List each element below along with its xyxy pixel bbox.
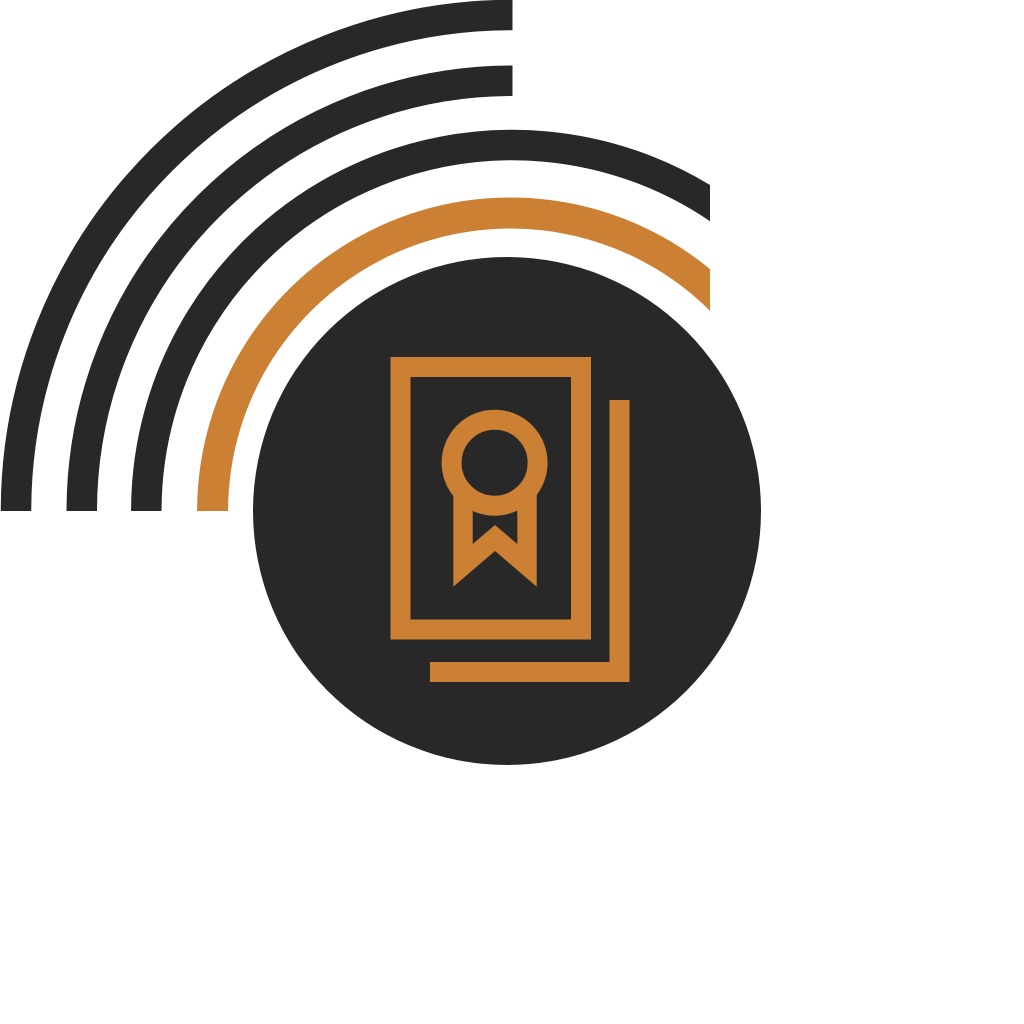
arc: second dark: [82, 81, 512, 511]
icon: front page: [400, 367, 581, 630]
icon: certificate: [400, 367, 620, 672]
infographic: certificate badge with signal arcs: [0, 0, 761, 765]
icon: back page corner: [430, 400, 620, 672]
arc: inner orange: [213, 213, 731, 511]
icon: ribbon tails: [453, 480, 537, 587]
arc: outermost dark: [16, 15, 512, 511]
dark circle background: [253, 257, 761, 765]
icon: medal ring: [452, 420, 538, 506]
arc: third dark: [146, 145, 732, 511]
